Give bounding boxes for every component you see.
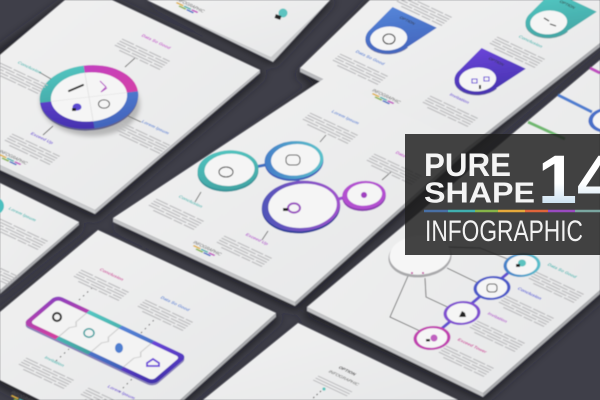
text block: blue	[135, 300, 193, 331]
label: Lorem Ipsum	[7, 206, 38, 222]
text block: bottom	[214, 236, 272, 267]
connector: blue dotted	[141, 319, 155, 333]
icon: stopwatch	[98, 100, 110, 108]
rainbow rule	[424, 210, 600, 212]
circle: purple icon	[436, 296, 488, 330]
text block: purple	[420, 96, 478, 127]
text block: right	[364, 154, 422, 185]
icon: bulb	[72, 103, 82, 111]
text block: blue	[496, 296, 554, 327]
panel: vertical chain sheet	[307, 60, 600, 397]
connector: pink dotted	[79, 288, 92, 300]
circle: target	[246, 171, 356, 243]
label: pink: Conclusion	[98, 267, 125, 282]
icon: nodes	[100, 81, 107, 92]
icon: rocket	[115, 343, 123, 353]
connector: blue	[128, 116, 141, 122]
label: teal: Data So Good	[546, 262, 578, 279]
connector: purple	[43, 126, 53, 135]
connector: teal dotted	[56, 349, 69, 361]
title: shape: SHAPE	[424, 178, 535, 210]
text block: top pink	[394, 0, 452, 26]
label: pink heading: Data So Good	[140, 33, 172, 50]
text lines	[313, 376, 352, 396]
dotted connector	[311, 387, 326, 400]
label: purple heading: Exceed Up	[29, 131, 55, 145]
text block: lower	[0, 254, 18, 285]
connector: teal	[39, 72, 51, 79]
text block: purple	[78, 388, 136, 400]
connector lines	[390, 247, 515, 331]
sheet logo	[172, 0, 206, 16]
banner panel	[405, 134, 600, 255]
tag: blue: OPTION	[398, 15, 417, 26]
panel: circle diagram sheet	[0, 0, 260, 214]
heading: OPTION	[337, 365, 357, 376]
text block: left	[146, 199, 204, 230]
tag: teal	[513, 0, 597, 45]
text block: teal	[16, 358, 74, 389]
label: pink: Exceed Tower	[456, 337, 488, 354]
title: pure: PURE	[424, 147, 511, 183]
sheet logo	[189, 240, 223, 259]
connector: right	[382, 172, 391, 180]
sheet: top centre	[147, 0, 330, 62]
connector: pink	[125, 58, 135, 67]
connector: bottom	[262, 231, 268, 240]
panel: tag diagram sheet	[300, 0, 600, 152]
connector: purple dotted	[119, 379, 132, 392]
icon: gear	[53, 313, 61, 321]
circle: pink icon	[406, 321, 458, 355]
label: purple: Lorem Ipsum	[106, 384, 137, 400]
title banner text	[424, 141, 600, 248]
sheet logo	[7, 390, 41, 400]
text block: top	[300, 113, 358, 144]
connector: top	[320, 135, 326, 142]
circle: blue icon	[466, 271, 518, 305]
circle: blue top	[580, 102, 600, 138]
text block: teal	[526, 272, 584, 303]
circle: teal bulb	[496, 248, 548, 282]
label: purple: Invitation	[486, 311, 509, 324]
label: blue: Data So Good	[159, 295, 191, 312]
tag: purple: OPTION	[487, 56, 506, 67]
label: teal heading: Conclusion	[16, 60, 43, 75]
text block: purple	[2, 134, 60, 165]
icon: people	[84, 329, 94, 337]
panel: bottom centre sheet	[203, 323, 458, 400]
panel: step band sheet	[0, 230, 276, 400]
icon: bulb	[274, 8, 288, 20]
icon: rocket	[69, 85, 83, 91]
sheet logo	[368, 88, 402, 107]
text block: blue	[330, 54, 388, 85]
circle: bell icon	[253, 134, 335, 188]
large circle	[376, 228, 464, 285]
panel: linked circles sheet	[113, 78, 470, 306]
label: teal heading: Conclusion	[517, 34, 544, 49]
label: blue heading: Data So Good	[354, 49, 386, 66]
label: blue heading: Lorem Ipsum	[140, 119, 171, 135]
text block: pink	[112, 39, 170, 70]
label: teal: Invitation	[43, 355, 66, 368]
label: right: Data	[394, 150, 408, 158]
label: bottom: Exceed Up	[244, 232, 270, 246]
step band	[23, 295, 187, 387]
text block: pink	[436, 346, 494, 377]
text block: blue	[112, 123, 170, 154]
text block	[0, 219, 48, 250]
circle: teal stopwatch	[185, 143, 271, 199]
sheet logo	[0, 149, 29, 168]
connectors	[250, 164, 346, 200]
label: top: Lorem Ipsum	[330, 109, 361, 125]
text block: pink	[71, 270, 129, 301]
label: left: Conclusion	[177, 194, 204, 209]
tag: blue	[353, 7, 437, 61]
circle: teal partial	[0, 197, 4, 215]
text block: teal	[487, 37, 545, 68]
circle: bulb	[333, 175, 395, 217]
panel: left partial sheet	[0, 183, 79, 294]
subheading: INFOGRAPHIC	[327, 369, 361, 387]
chain links	[440, 273, 508, 330]
connector: left	[195, 192, 201, 202]
circle chart	[20, 53, 158, 143]
icon: house	[147, 359, 159, 366]
label: blue: Conclusion	[516, 286, 543, 301]
line accents	[528, 68, 600, 139]
label: purple heading: Invitation	[448, 92, 471, 105]
tag: purple	[442, 48, 526, 102]
text block: teal	[0, 63, 48, 94]
text block: purple	[467, 321, 525, 352]
